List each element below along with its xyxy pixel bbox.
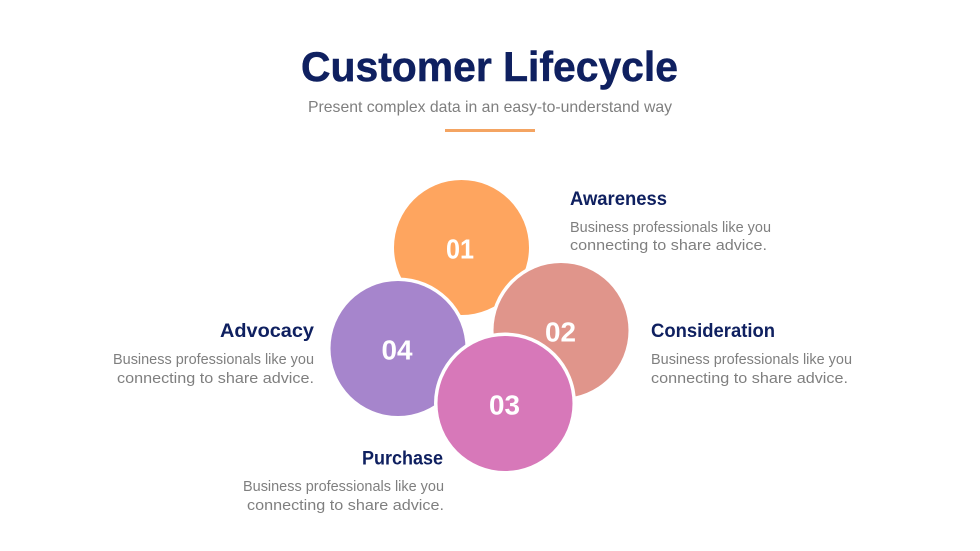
text block: Awareness [570, 189, 771, 254]
circle 01 [394, 180, 529, 315]
title: Customer Lifecycle [301, 43, 678, 90]
text block: Awareness: Business professionals like you [570, 219, 771, 236]
text block: Advocacy: Advocacy [220, 321, 314, 342]
circle 04 [327, 278, 469, 420]
text block: Advocacy: connecting to share advice. [117, 370, 314, 387]
circle 02: 02 [545, 316, 576, 348]
subtitle: Present complex data in an easy-to-understand way [308, 99, 672, 116]
text block: Purchase: Business professionals like you [243, 478, 444, 495]
circle 02 [490, 260, 632, 402]
text block: Purchase: Purchase [362, 448, 443, 470]
text block: Advocacy [113, 321, 314, 387]
title underline [445, 129, 535, 132]
text block: Advocacy: Business professionals like you [113, 351, 314, 368]
text block: Awareness: connecting to share advice. [570, 237, 767, 254]
circle 04: 04 [382, 334, 413, 366]
text block: Consideration: connecting to share advice. [651, 370, 848, 387]
text block: Purchase: connecting to share advice. [247, 497, 444, 514]
text block: Consideration: Consideration [651, 321, 775, 342]
text block: Purchase [243, 448, 444, 514]
circle 03 [434, 332, 576, 474]
text block: Consideration: Business professionals like you [651, 351, 852, 368]
circle 03: 03 [489, 390, 520, 420]
text block: Consideration [651, 321, 852, 387]
circle 01: 01 [446, 234, 474, 264]
text block: Awareness: Awareness [570, 189, 667, 210]
